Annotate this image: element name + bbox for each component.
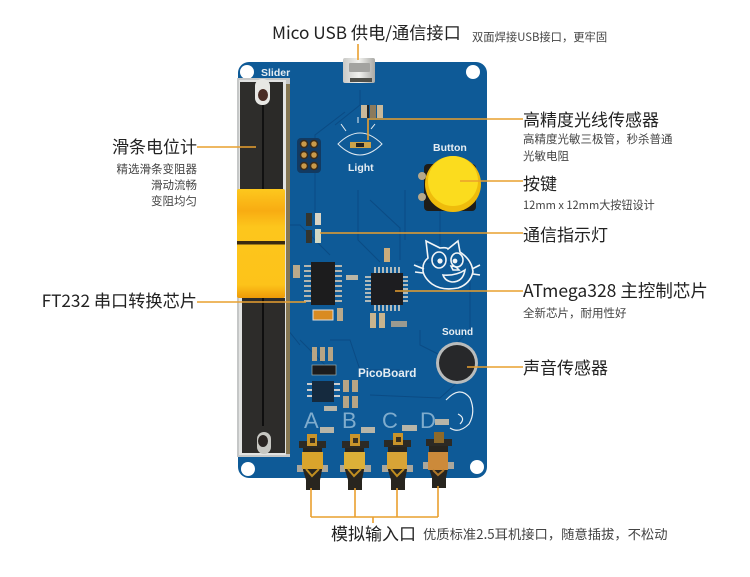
ear icon (446, 392, 473, 430)
label: button: 按键 (523, 170, 557, 195)
title: micro USB label (272, 19, 607, 45)
label: slider potentiometer: 变阻均匀 (151, 193, 197, 209)
port letters A B C D (304, 408, 436, 433)
microphone sound sensor: Sound (442, 327, 473, 338)
label: FT232: FT232 串口转换芯片 (42, 287, 197, 312)
label: ATmega328: ATmega328 主控制芯片 (523, 278, 708, 303)
FT232 chip (293, 262, 343, 321)
jack B (340, 434, 371, 490)
port letters A B C D: D (420, 408, 436, 433)
label: indicator LEDs: 通信指示灯 (523, 221, 608, 246)
slider potentiometer (237, 78, 290, 457)
PCB board (238, 62, 487, 478)
title: micro USB label: 双面焊接USB接口，更牢固 (472, 29, 607, 45)
label: ATmega328 (523, 278, 708, 321)
header pins (297, 138, 321, 173)
push button (418, 142, 481, 212)
port letters A B C D: C (382, 408, 398, 433)
label: slider potentiometer: 滑条电位计 (112, 133, 197, 158)
board label: Slider: Slider (261, 67, 290, 79)
jack C (382, 433, 413, 490)
microphone sound sensor (436, 327, 478, 384)
jack A (297, 434, 328, 490)
lower passive components (307, 347, 449, 433)
port letters A B C D: A (304, 408, 319, 433)
label: analog inputs (331, 520, 668, 545)
light sensor with eye icon (338, 105, 383, 174)
TX RX indicator LEDs (306, 213, 321, 243)
label: ATmega328: 全新芯片，耐用性好 (523, 305, 627, 321)
label: light sensor: 光敏电阻 (523, 148, 569, 164)
scratch cat logo (414, 241, 480, 289)
label: slider potentiometer: 滑动流畅 (151, 177, 197, 193)
label: light sensor: 高精度光线传感器 (523, 106, 659, 131)
label: slider potentiometer: 精选滑条变阻器 (116, 161, 197, 177)
ATmega328 chip (346, 248, 408, 328)
label: button (523, 170, 655, 213)
light sensor with eye icon: Light (348, 162, 374, 174)
micro USB connector (343, 58, 375, 83)
label: slider potentiometer (112, 133, 197, 209)
jack D (423, 432, 454, 488)
board label: PicoBoard: PicoBoard (358, 367, 416, 380)
title: micro USB label: Mico USB 供电/通信接口 (272, 19, 461, 44)
label: light sensor: 高精度光敏三极管，秒杀普通 (523, 131, 673, 147)
leader lines (197, 44, 523, 523)
port letters A B C D: B (342, 408, 357, 433)
audio jacks (297, 432, 454, 490)
label: light sensor (523, 106, 673, 164)
yellow slider knob (237, 189, 285, 298)
label: analog inputs: 模拟输入口 (331, 520, 416, 545)
label: sound sensor: 声音传感器 (523, 354, 608, 379)
push button: Button (433, 142, 467, 154)
label: analog inputs: 优质标准2.5耳机接口，随意插拔，不松动 (423, 524, 668, 543)
label: button: 12mm x 12mm大按钮设计 (523, 197, 655, 213)
